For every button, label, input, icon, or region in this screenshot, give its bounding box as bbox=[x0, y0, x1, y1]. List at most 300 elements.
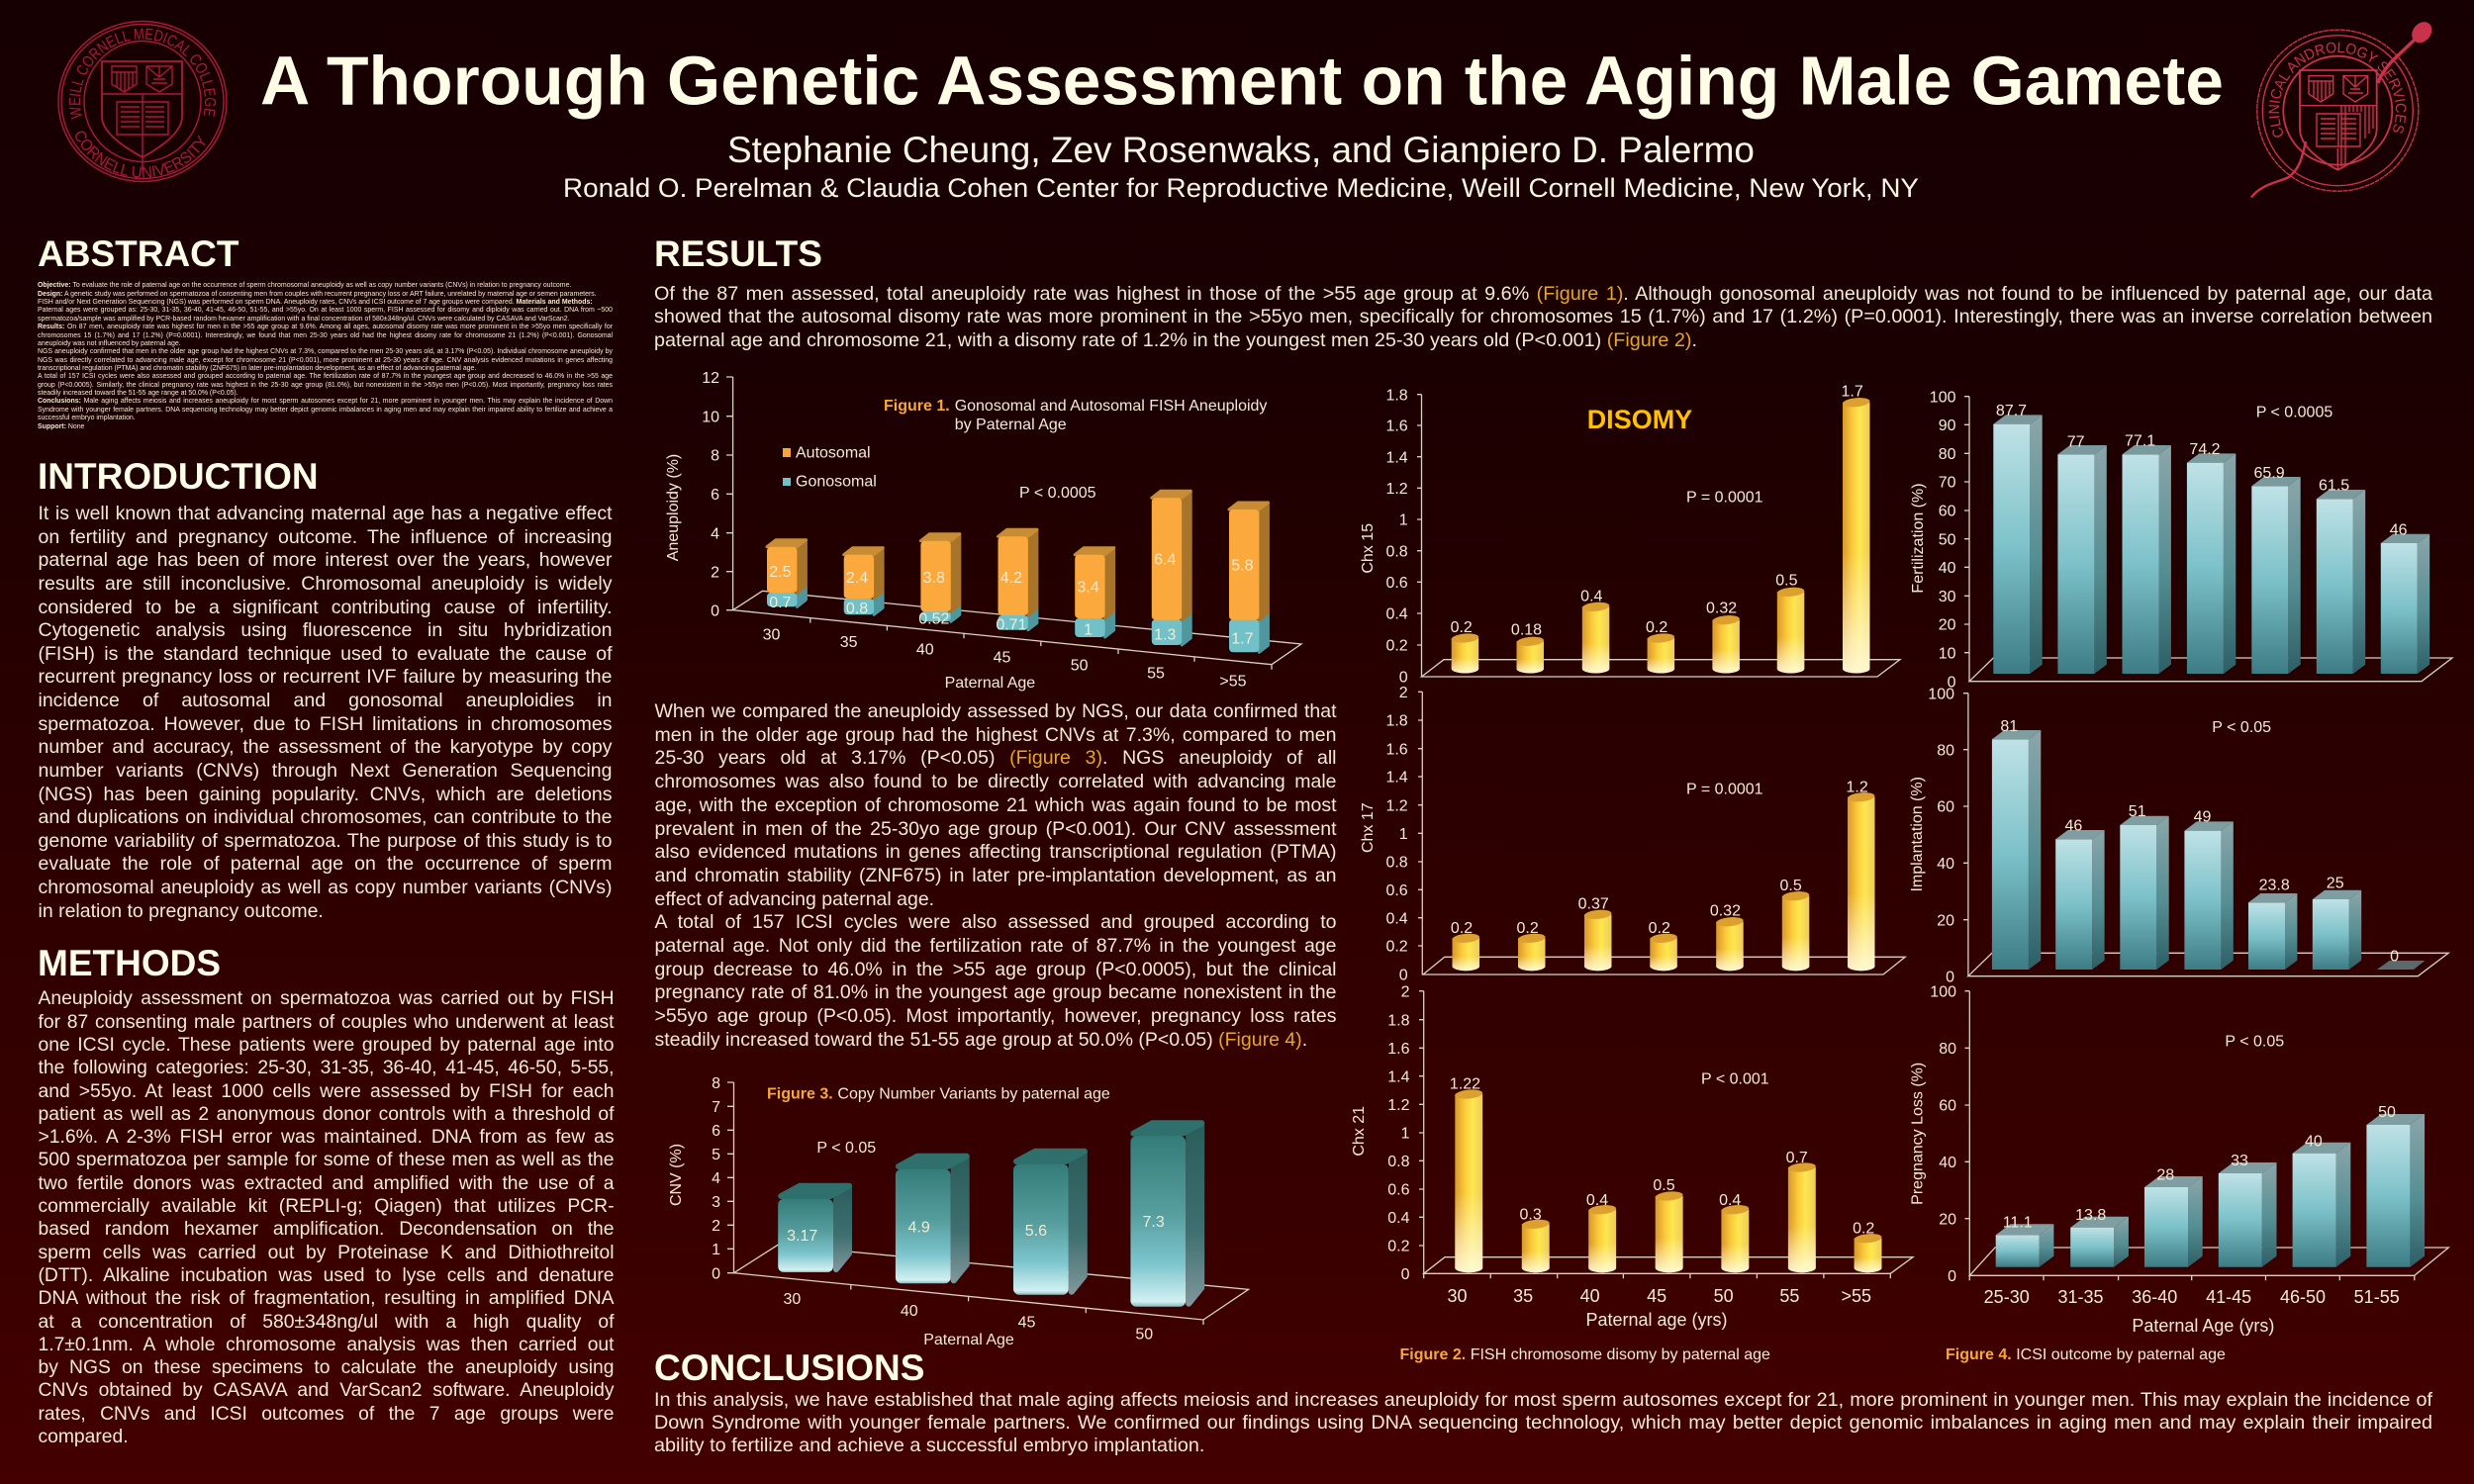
figure 2 bottom: chromosome 21 disomy chart: 1.8 bbox=[1387, 1012, 1410, 1029]
cylinder bars bbox=[1451, 397, 1870, 673]
text: abstract body: chromosomes 15 (1.7%) and 17 (1.2%) (P=0.0001). Interestingly, we found that men 25-30 years old had the highest disomy rate for chromosome 21 (1.2%) (P<0.001). Gonosomal bbox=[38, 332, 613, 339]
figure 3: copy number variants chart: 4 bbox=[712, 1170, 720, 1187]
bar value labels bbox=[2000, 718, 2399, 966]
bar value labels: 6.4 bbox=[1154, 552, 1176, 569]
3D bars bbox=[778, 1123, 1201, 1307]
figure 1: gonosomal and autosomal aneuploidy chart: 45 bbox=[994, 650, 1011, 667]
text: introduction body: in relation to pregnancy outcome. bbox=[38, 900, 324, 922]
figure 4 bottom: pregnancy loss chart: Figure 4. bbox=[1946, 1346, 2012, 1363]
bar value labels bbox=[1451, 780, 1868, 937]
text: introduction body: Cytogenetic analysis using fluorescence in situ hybridization bbox=[38, 619, 612, 641]
text: abstract body: FISH and/or Next Generation Sequencing (NGS) was performed on sperm DNA. Aneuploidy rates, CNVs and ICSI outcome of 7 age groups were compared. Materials and Methods: bbox=[38, 299, 593, 306]
figure 1: gonosomal and autosomal aneuploidy chart: Paternal Age bbox=[945, 675, 1035, 692]
bar value labels: 11.1 bbox=[2003, 1215, 2033, 1232]
text: introduction body: paternal age has been of more interest over the years, however bbox=[38, 549, 612, 571]
bar value labels bbox=[769, 552, 1254, 648]
text: results discussion: prevalent in men of the 25-30yo age group (P<0.001). Our CNV assessment bbox=[655, 818, 1336, 840]
text: abstract body: group (P<0.0005). Similarly, the clinical pregnancy rate was highest in the 25-30 age group (81.0%), but nonexistent in the >55yo men (P<0.05). Most importantly, pregnancy loss rates bbox=[38, 382, 613, 389]
text: results discussion: >55yo age group (P<0.05). Most importantly, however, pregnancy loss rates bbox=[655, 1005, 1336, 1027]
bar value labels: 1.3 bbox=[1154, 627, 1176, 644]
figure 2 top: chromosome 15 disomy chart bbox=[1360, 384, 1900, 687]
text: abstract body: A total of 157 ICSI cycles were also assessed and grouped according to paternal age. The fertilization rate of 87.7% in the youngest age group and decreased to 46.0% in the >55 age bbox=[38, 373, 613, 380]
figure 2 bottom: chromosome 21 disomy chart: 1.2 bbox=[1387, 1097, 1410, 1114]
bar value labels: 46 bbox=[2390, 522, 2408, 539]
figure 3: copy number variants chart: P < 0.05 bbox=[816, 1140, 876, 1157]
figure 4 bottom: pregnancy loss chart: 40 bbox=[1939, 1155, 1956, 1171]
figure 4 bottom: pregnancy loss chart: 100 bbox=[1930, 983, 1956, 1000]
text: methods body: and >55yo. At least 1000 cells were assessed by FISH for each bbox=[38, 1081, 614, 1102]
title: A Thorough Genetic Assessment on the Aging Male Gamete bbox=[260, 42, 2224, 119]
figure 2 top: chromosome 15 disomy chart: 0.6 bbox=[1385, 575, 1408, 592]
bar value labels: 0.2 bbox=[1451, 619, 1473, 636]
text: introduction body: (NGS) has been gaining popularity. CNVs, which are deletions bbox=[38, 784, 612, 805]
figure 2 top: chromosome 15 disomy chart: 0.2 bbox=[1385, 638, 1408, 655]
bar value labels: 33 bbox=[2231, 1153, 2248, 1169]
figure 2 top: chromosome 15 disomy chart: 1.8 bbox=[1385, 387, 1408, 404]
text: results discussion: and chromatin stability (ZNF675) in later pre-implantation development, as an bbox=[655, 865, 1336, 886]
figure 4 bottom: pregnancy loss chart: 51-55 bbox=[2354, 1287, 2400, 1307]
figure 4 top: fertilization rate chart: 80 bbox=[1939, 446, 1956, 463]
bar value labels: 0.4 bbox=[1580, 588, 1603, 604]
logo: Weill Cornell Medical College seal: WEILL CORNELL MEDICAL COLLEGE bbox=[69, 28, 216, 120]
figure 2 middle: chromosome 17 disomy chart: 1.2 bbox=[1385, 797, 1408, 814]
bar value labels: 2.4 bbox=[846, 570, 868, 587]
text: abstract body: Results: On 87 men, aneuploidy rate was highest for men in the >55 age group at 9.6%. Among all ages, autosomal disomy rate was more prominent in the >55yo men specifically for bbox=[38, 324, 613, 330]
bar value labels: 5.6 bbox=[1025, 1223, 1047, 1240]
figure 2 middle: chromosome 17 disomy chart: Chx 17 bbox=[1360, 802, 1377, 853]
figure 2 middle: chromosome 17 disomy chart: P = 0.0001 bbox=[1686, 781, 1763, 797]
figure 2 top: chromosome 15 disomy chart: 0 bbox=[1399, 670, 1408, 687]
text: results intro: Of the 87 men assessed, total aneuploidy rate was highest in those of the >55 age group at 9.6% (Figure 1). Although gonosomal aneuploidy was not found to be influenced by paternal age, our data bbox=[654, 283, 2432, 305]
bar value labels: 0.5 bbox=[1775, 573, 1798, 590]
figure 1: gonosomal and autosomal aneuploidy chart: Figure 1. bbox=[884, 398, 950, 415]
3D bars bbox=[1992, 730, 2425, 970]
text: abstract body: spermatozoa/sample was amplified by PCR-based random hexamer amplification with a final concentration of 580±348ng/ul. CNVs were calculated by CASAVA and VarScan2. bbox=[38, 316, 570, 323]
bar value labels: 0.71 bbox=[996, 617, 1027, 634]
text: introduction body: number variants (CNVs) through Next Generation Sequencing bbox=[38, 760, 612, 782]
bar value labels: 0.2 bbox=[1516, 920, 1539, 937]
bar value labels: 2.5 bbox=[769, 564, 792, 581]
figure 1: gonosomal and autosomal aneuploidy chart: 4 bbox=[711, 525, 719, 542]
figure 4 bottom: pregnancy loss chart: 0 bbox=[1948, 1268, 1956, 1285]
text: abstract body: Objective: To evaluate the role of paternal age on the occurrence of sperm chromosomal aneuploidy as well as copy number variants (CNVs) in relation to pregnancy outcome. bbox=[38, 282, 571, 289]
figure 4 top: fertilization rate chart: 60 bbox=[1939, 504, 1956, 520]
text: results discussion: age, with the exception of chromosome 21 which was again found to be most bbox=[655, 794, 1336, 816]
logo: Clinical Andrology Services seal with sperm: CLINICAL ANDROLOGY SERVICES bbox=[2268, 42, 2407, 138]
bar value labels: 74.2 bbox=[2189, 441, 2221, 458]
figure 2 top: chromosome 15 disomy chart: 1.6 bbox=[1385, 418, 1408, 435]
text: methods body: patient as well as 2 anonymous donor controls with a threshold of bbox=[38, 1104, 614, 1125]
figure 1: gonosomal and autosomal aneuploidy chart: >55 bbox=[1219, 673, 1247, 690]
figure 1: gonosomal and autosomal aneuploidy chart: Gonosomal and Autosomal FISH Aneuploidy bbox=[955, 398, 1267, 415]
bar value labels: 0.2 bbox=[1646, 619, 1667, 636]
figure 4 middle: implantation rate chart: 60 bbox=[1937, 799, 1954, 816]
heading: results: RESULTS bbox=[654, 233, 822, 274]
text: methods body: Aneuploidy assessment on spermatozoa was carried out by FISH bbox=[38, 988, 614, 1009]
figure 3: copy number variants chart: 7 bbox=[712, 1099, 720, 1116]
figure 2 top: chromosome 15 disomy chart: 1 bbox=[1399, 512, 1408, 529]
figure 1: gonosomal and autosomal aneuploidy chart: P < 0.0005 bbox=[1019, 485, 1096, 502]
figure 3: copy number variants chart: 1 bbox=[712, 1242, 720, 1258]
figure 2 middle: chromosome 17 disomy chart: 0.2 bbox=[1385, 939, 1408, 956]
figure 2 bottom: chromosome 21 disomy chart: FISH chromosome disomy by paternal age bbox=[1471, 1346, 1770, 1363]
figure 1: gonosomal and autosomal aneuploidy chart: Gonosomal bbox=[796, 473, 877, 491]
figure 4 bottom: pregnancy loss chart: 36-40 bbox=[2132, 1287, 2177, 1307]
text: conclusions body: Down Syndrome with younger female partners. We confirmed our findings using DNA sequencing technology, which may better depict genomic imbalances in aging men and may explain their impaired bbox=[654, 1412, 2432, 1434]
bar value labels bbox=[1450, 1076, 1874, 1237]
bar value labels bbox=[1451, 384, 1863, 639]
figure 4 bottom: pregnancy loss chart: 60 bbox=[1939, 1098, 1956, 1115]
figure 2 top: chromosome 15 disomy chart: 0.8 bbox=[1385, 543, 1408, 560]
text: conclusions body: In this analysis, we have established that male aging affects meiosis and increases aneuploidy for most sperm autosomes except for 21, more prominent in younger men. This may explain the incidence of bbox=[654, 1389, 2432, 1411]
figure 1: gonosomal and autosomal aneuploidy chart: 0 bbox=[711, 603, 719, 619]
text: methods body: by NGS on these specimens to calculate the aneuploidy using bbox=[38, 1357, 614, 1378]
figure 2 bottom: chromosome 21 disomy chart: 35 bbox=[1513, 1286, 1533, 1306]
figure 3: copy number variants chart: 40 bbox=[901, 1303, 918, 1320]
text: abstract body bbox=[38, 281, 613, 429]
text: results discussion: 25-30 years old at 3.17% (P<0.05) (Figure 3). NGS aneuploidy of all bbox=[655, 747, 1337, 769]
figure 2 middle: chromosome 17 disomy chart: 0.4 bbox=[1385, 910, 1408, 927]
figure 1: gonosomal and autosomal aneuploidy chart: 30 bbox=[763, 626, 780, 643]
bar value labels: 0.4 bbox=[1586, 1192, 1608, 1209]
figure 4 bottom: pregnancy loss chart: Paternal Age (yrs) bbox=[2132, 1316, 2274, 1336]
bar value labels: 46 bbox=[2065, 817, 2082, 834]
text: methods body: based random hexamer amplification. Decondensation on the bbox=[38, 1219, 614, 1240]
figure 4 bottom: pregnancy loss chart: 31-35 bbox=[2057, 1287, 2104, 1307]
text: methods body: for 87 consenting male partners of couples who underwent at least bbox=[38, 1012, 614, 1033]
figure 4 bottom: pregnancy loss chart: 80 bbox=[1939, 1041, 1956, 1058]
figure 1: gonosomal and autosomal aneuploidy chart: 55 bbox=[1147, 665, 1165, 682]
text: results intro bbox=[654, 283, 2432, 351]
figure 4 middle: implantation rate chart: 80 bbox=[1937, 742, 1954, 759]
text: introduction body: considered to be a significant contributing cause of infertility. bbox=[38, 596, 612, 617]
figure 4 top: fertilization rate chart: P < 0.0005 bbox=[2256, 405, 2332, 421]
bar value labels: 13.8 bbox=[2075, 1207, 2106, 1224]
figure 3: copy number variants chart: 50 bbox=[1135, 1326, 1153, 1343]
bar value labels: 40 bbox=[2305, 1133, 2323, 1150]
bar value labels: 1.7 bbox=[1231, 631, 1254, 648]
bar value labels: 0.32 bbox=[1710, 903, 1741, 920]
text: methods body: the following categories: 25-30, 31-35, 36-40, 41-45, 46-50, 5-55, bbox=[38, 1058, 614, 1078]
figure 2 top: chromosome 15 disomy chart: P = 0.0001 bbox=[1686, 489, 1763, 506]
logo: Weill Cornell Medical College seal: CORNELL UNIVERSITY bbox=[75, 131, 206, 178]
figure 2 middle: chromosome 17 disomy chart bbox=[1360, 685, 1905, 984]
bar value labels: 3.17 bbox=[787, 1228, 817, 1245]
figure 1: gonosomal and autosomal aneuploidy chart: 35 bbox=[840, 634, 858, 651]
text: results discussion: group decrease to 46.0% in the >55 age group (P<0.0005), but the clinical bbox=[655, 959, 1336, 980]
bar value labels: 7.3 bbox=[1142, 1214, 1165, 1231]
figure 2 bottom: chromosome 21 disomy chart: 0.8 bbox=[1387, 1154, 1410, 1170]
text: abstract body: Design: A genetic study was performed on spermatozoa of consenting men from couples with recurrent pregnancy loss or ART failure, unrelated by maternal age or semen parameters. bbox=[38, 291, 597, 298]
heading: conclusions: CONCLUSIONS bbox=[654, 1347, 924, 1388]
figure 3: copy number variants chart: 2 bbox=[712, 1218, 720, 1235]
figure 3: copy number variants chart: 0 bbox=[712, 1265, 720, 1282]
figure 3: copy number variants chart: 8 bbox=[712, 1075, 720, 1092]
text: results discussion: paternal age. Not only did the fertilization rate of 87.7% in the youngest age bbox=[655, 935, 1336, 957]
text: results intro: paternal age and chromosome 21, with a disomy rate of 1.2% in the youngest men 25-30 years old (P<0.001) (Figure 2). bbox=[654, 329, 1697, 351]
figure 1: gonosomal and autosomal aneuploidy chart: Autosomal bbox=[796, 445, 871, 461]
figure 4 top: fertilization rate chart: 50 bbox=[1939, 531, 1956, 548]
bar value labels: 3.8 bbox=[923, 570, 945, 587]
text: methods body: DNA without the risk of fragmentation, resulting in amplified DNA bbox=[38, 1288, 614, 1309]
figure 4 top: fertilization rate chart: 70 bbox=[1939, 475, 1956, 492]
text: introduction body: genome variability of spermatozoa. The purpose of this study is to bbox=[38, 830, 612, 852]
figure 4 middle: implantation rate chart: 20 bbox=[1937, 912, 1954, 929]
figure 4 top: fertilization rate chart: 10 bbox=[1939, 645, 1956, 662]
text: results discussion: effect of advancing paternal age. bbox=[655, 888, 934, 910]
text: results discussion: chromosomes was also found to be directly correlated with advancing male bbox=[655, 771, 1336, 792]
figure 1: gonosomal and autosomal aneuploidy chart: 8 bbox=[711, 448, 719, 465]
figure 2 bottom: chromosome 21 disomy chart: 1.4 bbox=[1387, 1068, 1410, 1085]
text: introduction body: chromosomal aneuploidy as well as copy number variants (CNVs) bbox=[38, 877, 612, 898]
text: methods body bbox=[38, 988, 615, 1447]
figure 2 middle: chromosome 17 disomy chart: 1.4 bbox=[1385, 770, 1408, 787]
text: results discussion: A total of 157 ICSI cycles were also assessed and grouped according to bbox=[655, 911, 1336, 933]
bar value labels: 0.52 bbox=[918, 611, 949, 628]
text: introduction body: spermatozoa. However, due to FISH limitations in chromosomes bbox=[38, 713, 612, 735]
text: introduction body bbox=[38, 503, 613, 922]
bar value labels: 77.1 bbox=[2125, 433, 2155, 450]
logo: Weill Cornell Medical College seal bbox=[57, 20, 228, 182]
text: results intro: showed that the autosomal disomy rate was more prominent in the >55yo men, specifically for chromosomes 15 (1.7%) and 17 (1.2%) (P=0.0001). Interestingly, there was an inverse correlation between bbox=[654, 306, 2432, 327]
figure 1: gonosomal and autosomal aneuploidy chart: 50 bbox=[1071, 657, 1089, 674]
figure 3: copy number variants chart: Copy Number Variants by paternal age bbox=[837, 1086, 1110, 1102]
bar value labels: 0.37 bbox=[1578, 895, 1609, 912]
figure 3: copy number variants chart: 6 bbox=[712, 1123, 720, 1140]
figure 4 top: fertilization rate chart: 100 bbox=[1930, 389, 1956, 406]
figure 4 bottom: pregnancy loss chart: ICSI outcome by paternal age bbox=[2016, 1346, 2226, 1363]
bar value labels: 0.5 bbox=[1779, 878, 1802, 894]
figure 2 middle: chromosome 17 disomy chart: 1.6 bbox=[1385, 741, 1408, 758]
figure 4 middle: implantation rate chart bbox=[1909, 686, 2448, 985]
bar value labels: 49 bbox=[2194, 809, 2211, 826]
bar value labels: 23.8 bbox=[2259, 878, 2290, 894]
bar value labels: 28 bbox=[2156, 1166, 2174, 1183]
figure 4 middle: implantation rate chart: 40 bbox=[1937, 856, 1954, 873]
bar value labels: 81 bbox=[2000, 718, 2018, 735]
figure 4 top: fertilization rate chart: 40 bbox=[1939, 560, 1956, 577]
figure 2 top: chromosome 15 disomy chart: 1.2 bbox=[1385, 481, 1408, 498]
bar value labels: 0.3 bbox=[1519, 1206, 1542, 1223]
bar value labels: 1.2 bbox=[1846, 780, 1868, 796]
text: methods body: sperm cells was carried out by Proteinase K and Dithiothreitol bbox=[38, 1243, 614, 1263]
figure 1: gonosomal and autosomal aneuploidy chart: 12 bbox=[702, 370, 719, 387]
bar value labels: 4.9 bbox=[907, 1220, 930, 1237]
text: methods body: 1.7±0.1nm. A whole chromosome analysis was then carried out bbox=[38, 1335, 614, 1355]
text: abstract body: Conclusions: Male aging affects meiosis and increases aneuploidy for most sperm autosomes except for 21, more prominent in younger men. This may explain the incidence of Down bbox=[38, 398, 613, 405]
bar value labels: 87.7 bbox=[1996, 403, 2027, 419]
figure 2 bottom: chromosome 21 disomy chart: Paternal age (yrs) bbox=[1585, 1310, 1728, 1330]
text: conclusions body: ability to fertilize and achieve a successful embryo implantation. bbox=[654, 1435, 1204, 1456]
figure 1: gonosomal and autosomal aneuploidy chart: 40 bbox=[916, 642, 934, 659]
figure 3: copy number variants chart: 45 bbox=[1018, 1315, 1035, 1332]
figure 3: copy number variants chart: 5 bbox=[712, 1147, 720, 1163]
figure 4 middle: implantation rate chart: Implantation (%) bbox=[1909, 777, 1926, 892]
figure 2 bottom: chromosome 21 disomy chart: >55 bbox=[1842, 1286, 1871, 1306]
figure 2 bottom: chromosome 21 disomy chart: 0.6 bbox=[1387, 1182, 1410, 1199]
figure 1: gonosomal and autosomal aneuploidy chart: 2 bbox=[711, 564, 719, 581]
figure 2 bottom: chromosome 21 disomy chart: 0.4 bbox=[1387, 1210, 1410, 1227]
figure 1: gonosomal and autosomal aneuploidy chart: 10 bbox=[702, 409, 719, 425]
figure 4 bottom: pregnancy loss chart: 20 bbox=[1939, 1211, 1956, 1228]
figure 4 top: fertilization rate chart: 20 bbox=[1939, 617, 1956, 634]
figure 2 middle: chromosome 17 disomy chart: 0 bbox=[1399, 968, 1408, 984]
bar value labels: 61.5 bbox=[2319, 478, 2349, 495]
text: abstract body: Syndrome with younger female partners. DNA sequencing technology may better depict genomic imbalances in aging men and may explain their impaired ability to fertilize and achieve a bbox=[38, 407, 613, 414]
text: results discussion: men in the older age group had the highest CNVs at 7.3%, compared to men bbox=[655, 724, 1336, 746]
bar value labels: 77 bbox=[2067, 433, 2085, 450]
text: results discussion: pregnancy rate of 81.0% in the youngest age group became nonexistent in the bbox=[655, 981, 1336, 1003]
text: methods body: CNVs obtained by CASAVA and VarScan2 software. Aneuploidy bbox=[38, 1380, 614, 1401]
figure 4 middle: implantation rate chart: P < 0.05 bbox=[2212, 719, 2271, 736]
figure 2 bottom: chromosome 21 disomy chart: Chx 21 bbox=[1351, 1106, 1368, 1157]
text: introduction body: recurrent pregnancy loss or recurrent IVF failure by measuring the bbox=[38, 666, 612, 688]
figure 2 bottom: chromosome 21 disomy chart: 0 bbox=[1401, 1266, 1410, 1283]
heading: introduction: INTRODUCTION bbox=[38, 456, 319, 497]
stacked 3D bars bbox=[767, 491, 1268, 652]
bar value labels: 51 bbox=[2129, 803, 2146, 820]
bar value labels bbox=[787, 1214, 1165, 1245]
figure 2 bottom: chromosome 21 disomy chart: 50 bbox=[1714, 1286, 1734, 1306]
figure 2 bottom: chromosome 21 disomy chart: 1 bbox=[1401, 1126, 1410, 1143]
3D bars bbox=[1993, 415, 2429, 674]
figure 3: copy number variants chart: Figure 3. bbox=[767, 1086, 833, 1102]
text: results discussion bbox=[655, 700, 1337, 1051]
bar value labels: 0.7 bbox=[769, 595, 792, 611]
figure 2 bottom: chromosome 21 disomy chart bbox=[1351, 983, 1913, 1363]
figure 3: copy number variants chart: CNV (%) bbox=[668, 1144, 685, 1206]
authors: Stephanie Cheung, Zev Rosenwaks, and Gianpiero D. Palermo bbox=[727, 130, 1755, 170]
figure 2 bottom: chromosome 21 disomy chart: 45 bbox=[1647, 1286, 1666, 1306]
figure 2 bottom: chromosome 21 disomy chart: 1.6 bbox=[1387, 1041, 1410, 1058]
bar value labels: 1 bbox=[1084, 621, 1093, 638]
cylinder bars bbox=[1452, 791, 1875, 971]
bar value labels bbox=[2003, 1104, 2396, 1232]
bar value labels: 0.18 bbox=[1511, 622, 1542, 639]
bar value labels: 1.7 bbox=[1841, 384, 1863, 401]
text: introduction body: number and accuracy, the assessment of the karyotype by copy bbox=[38, 736, 612, 758]
figure 4 top: fertilization rate chart: 30 bbox=[1939, 589, 1956, 605]
3D bars bbox=[1996, 1114, 2425, 1267]
text: results discussion: also evidenced mutations in genes affecting transcriptional regulation (PTMA) bbox=[655, 841, 1336, 863]
bar value labels: 0.2 bbox=[1649, 920, 1670, 937]
figure 2 middle: chromosome 17 disomy chart: 2 bbox=[1399, 685, 1408, 701]
bar value labels: 0.2 bbox=[1853, 1220, 1874, 1237]
text: introduction body: on fertility and pregnancy outcome. The influence of increasing bbox=[38, 526, 612, 548]
text: methods body: one ICSI cycle. These patients were grouped by paternal age into bbox=[38, 1035, 614, 1056]
figure 1: gonosomal and autosomal aneuploidy chart: 6 bbox=[711, 487, 719, 504]
figure 2 bottom: chromosome 21 disomy chart: 2 bbox=[1401, 983, 1410, 1000]
text: results discussion: steadily increased toward the 51-55 age group at 50.0% (P<0.05) (Figure 4). bbox=[655, 1029, 1307, 1051]
text: methods body: two fertile donors was extracted and amplified with the use of a bbox=[38, 1173, 614, 1194]
figure 3: copy number variants chart: 30 bbox=[784, 1291, 801, 1308]
figure 2 bottom: chromosome 21 disomy chart: 40 bbox=[1580, 1286, 1600, 1306]
text: abstract body: steadily increased toward the 51-55 age range at 50.0% (P<0.05). bbox=[38, 390, 238, 397]
text: methods body: (DTT). Alkaline incubation was used to lyse cells and denature bbox=[38, 1265, 614, 1286]
bar value labels: 0.32 bbox=[1706, 601, 1737, 617]
text: methods body: >1.6%. A 2-3% FISH error was maintained. DNA from as few as bbox=[38, 1127, 614, 1148]
figure 1: gonosomal and autosomal aneuploidy chart: Aneuploidy (%) bbox=[665, 454, 682, 561]
figure 3: copy number variants chart: Paternal Age bbox=[923, 1332, 1014, 1348]
bar value labels: 0.7 bbox=[1786, 1150, 1808, 1166]
figure 2 bottom: chromosome 21 disomy chart: 30 bbox=[1447, 1286, 1468, 1306]
bar value labels bbox=[1996, 403, 2408, 539]
figure 2 bottom: chromosome 21 disomy chart: Figure 2. bbox=[1399, 1346, 1466, 1363]
figure 3: copy number variants chart: 3 bbox=[712, 1194, 720, 1211]
bar value labels: 5.8 bbox=[1231, 558, 1254, 575]
affiliation: Ronald O. Perelman & Claudia Cohen Center for Reproductive Medicine, Weill Cornell Medicine, New York, NY bbox=[563, 173, 1919, 203]
figure 4 bottom: pregnancy loss chart: 25-30 bbox=[1984, 1287, 2030, 1307]
figure 2 bottom: chromosome 21 disomy chart: 0.2 bbox=[1387, 1239, 1410, 1255]
text: introduction body: results are still inconclusive. Chromosomal aneuploidy is widely bbox=[38, 573, 612, 595]
bar value labels: 0.4 bbox=[1719, 1192, 1741, 1209]
bar value labels: 0.2 bbox=[1451, 920, 1473, 937]
heading: methods: METHODS bbox=[38, 943, 221, 983]
text: abstract body: NGS was directly correlated to advancing male age, except for chromosome 21 (P<0.001), more prominent at 25-30 years of age. CNV analysis evidenced mutations in genes affecting bbox=[38, 357, 613, 364]
figure 4 top: fertilization rate chart: 90 bbox=[1939, 417, 1956, 434]
figure 4 bottom: pregnancy loss chart: 41-45 bbox=[2206, 1287, 2251, 1307]
figure 2 bottom: chromosome 21 disomy chart: 55 bbox=[1779, 1286, 1799, 1306]
figure 4 bottom: pregnancy loss chart: Pregnancy Loss (%) bbox=[1910, 1063, 1926, 1205]
text: introduction body: evaluate the role of paternal age on the occurrence of sperm bbox=[38, 853, 612, 875]
figure 4 bottom: pregnancy loss chart bbox=[1910, 983, 2448, 1363]
bar value labels: 0.5 bbox=[1653, 1177, 1675, 1194]
text: methods body: rates, CNVs and ICSI outcomes of the 7 age groups were bbox=[38, 1404, 614, 1425]
bar value labels: 50 bbox=[2378, 1104, 2396, 1121]
logo: Clinical Andrology Services seal with sperm bbox=[2250, 22, 2432, 198]
figure 2 top: chromosome 15 disomy chart: 1.4 bbox=[1385, 449, 1408, 466]
text: introduction body: and duplications on individual chromosomes, can contribute to the bbox=[38, 806, 612, 828]
figure 2 middle: chromosome 17 disomy chart: 1 bbox=[1399, 826, 1408, 843]
text: abstract body: aneuploidy was not influenced by paternal age. bbox=[38, 340, 181, 347]
bar value labels: 25 bbox=[2327, 876, 2344, 892]
text: abstract body: Paternal ages were grouped as: 25-30, 31-35, 36-40, 41-45, 46-50, 51-55, and >55yo. On at least 1000 sperm, FISH assessed for disomy and diploidy was carried out. DNA from ~500 bbox=[38, 307, 613, 314]
bar value labels: 0 bbox=[2390, 949, 2399, 966]
figure 4 top: fertilization rate chart: Fertilization (%) bbox=[1910, 483, 1927, 594]
figure 3: copy number variants chart bbox=[668, 1075, 1249, 1348]
text: conclusions body bbox=[654, 1389, 2432, 1456]
text: introduction body: It is well known that advancing maternal age has a negative effect bbox=[38, 503, 612, 524]
bar value labels: 3.4 bbox=[1077, 579, 1099, 596]
figure 2 bottom: chromosome 21 disomy chart: P < 0.001 bbox=[1701, 1071, 1769, 1088]
bar value labels: 0.8 bbox=[846, 601, 868, 617]
text: methods body: compared. bbox=[38, 1427, 129, 1447]
figure 2 middle: chromosome 17 disomy chart: 0.6 bbox=[1385, 882, 1408, 899]
figure 4 bottom: pregnancy loss chart: 46-50 bbox=[2280, 1287, 2326, 1307]
text: abstract body: transcriptional regulation (PTMA) and chromatin stability (ZNF675) in later pre-implantation development, as an effect of advancing paternal age. bbox=[38, 365, 476, 372]
figure 1: gonosomal and autosomal aneuploidy chart: by Paternal Age bbox=[955, 417, 1067, 433]
figure 4 top: fertilization rate chart bbox=[1910, 389, 2452, 691]
figure 4 middle: implantation rate chart: 0 bbox=[1946, 969, 1954, 985]
figure 4 middle: implantation rate chart: 100 bbox=[1928, 686, 1954, 702]
figure 2 middle: chromosome 17 disomy chart: 0.8 bbox=[1385, 855, 1408, 872]
bar value labels: 4.2 bbox=[1000, 570, 1022, 587]
figure 4 top: fertilization rate chart: 0 bbox=[1948, 674, 1956, 691]
text: introduction body: incidence of autosomal and gonosomal aneuploidies in bbox=[38, 690, 612, 711]
figure 4 bottom: pregnancy loss chart: P < 0.05 bbox=[2225, 1033, 2284, 1050]
text: abstract body: successful embryo implantation. bbox=[38, 415, 136, 421]
figure 2 top: chromosome 15 disomy chart: DISOMY bbox=[1587, 405, 1692, 434]
text: methods body: commercially available kit (REPLI-g; Qiagen) that utilizes PCR- bbox=[38, 1196, 614, 1217]
text: abstract body: NGS aneuploidy confirmed that men in the older age group had the highest CNVs at 7.3%, compared to the men 25-30 years old, at 3.17% (P<0.05). Individual chromosome aneuploidy by bbox=[38, 348, 613, 355]
bar value labels: 65.9 bbox=[2254, 465, 2285, 482]
text: methods body: at a concentration of 580±348ng/ul with a high quality of bbox=[38, 1312, 614, 1333]
figure 2 top: chromosome 15 disomy chart: 0.4 bbox=[1385, 606, 1408, 623]
cylinder bars bbox=[1455, 1088, 1882, 1272]
heading: abstract: ABSTRACT bbox=[38, 233, 238, 274]
figure 1: gonosomal and autosomal aneuploidy chart bbox=[665, 370, 1301, 692]
figure 2 middle: chromosome 17 disomy chart: 1.8 bbox=[1385, 713, 1408, 730]
